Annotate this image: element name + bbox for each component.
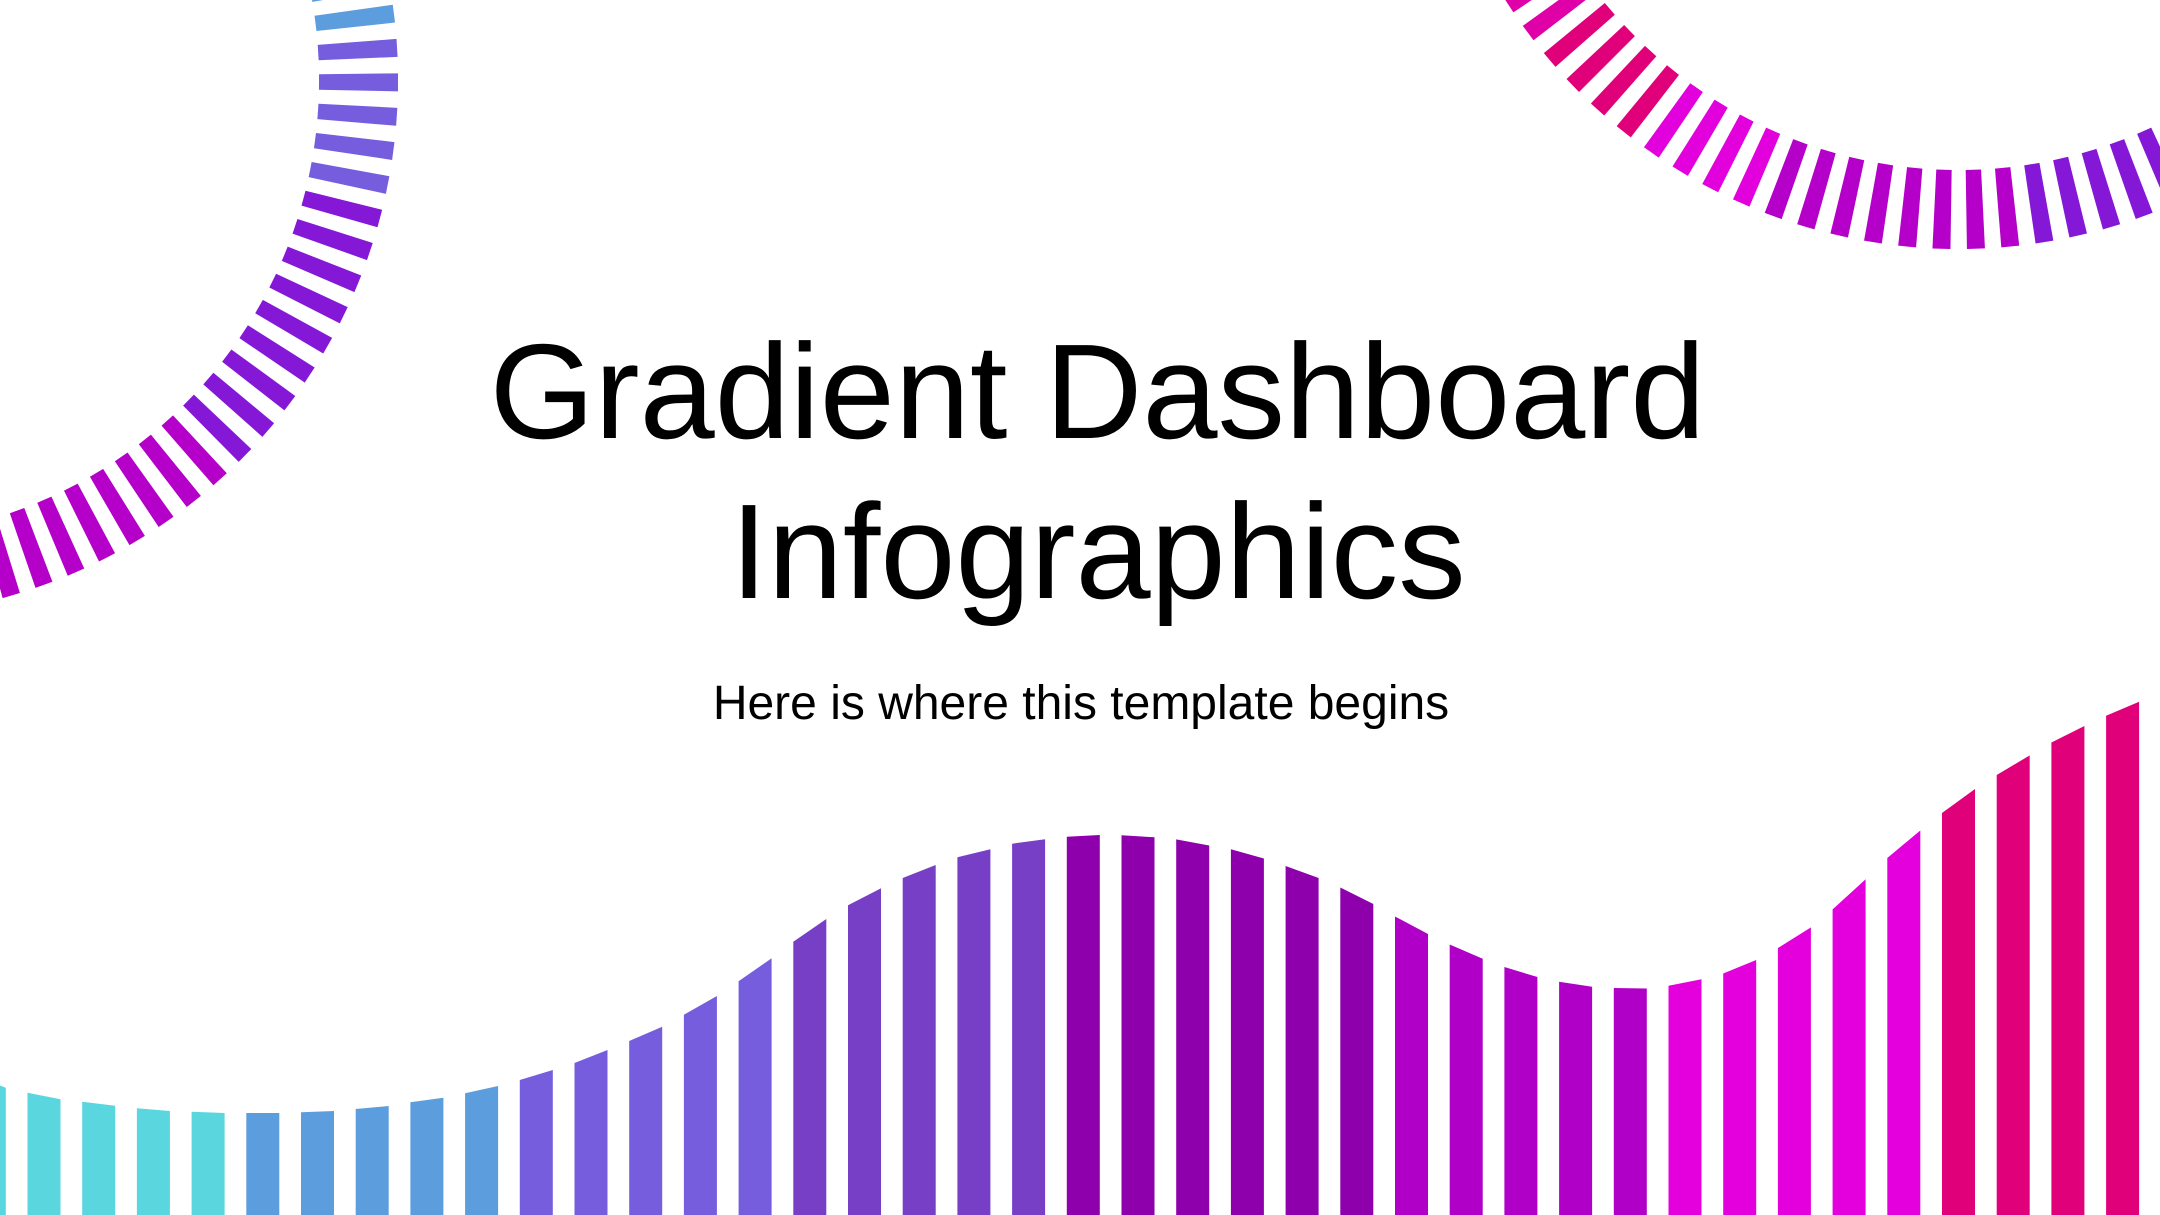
title: Gradient Dashboard bbox=[490, 316, 1705, 467]
wave bars: bottom gradient columns bbox=[0, 702, 2139, 1215]
title bbox=[490, 316, 1705, 627]
ring: top-left dashed gradient arc bbox=[0, 0, 398, 598]
ring: top-right dashed gradient arc bbox=[1486, 0, 2160, 249]
title: Infographics bbox=[730, 476, 1466, 627]
subtitle: Here is where this template begins bbox=[713, 677, 1449, 730]
